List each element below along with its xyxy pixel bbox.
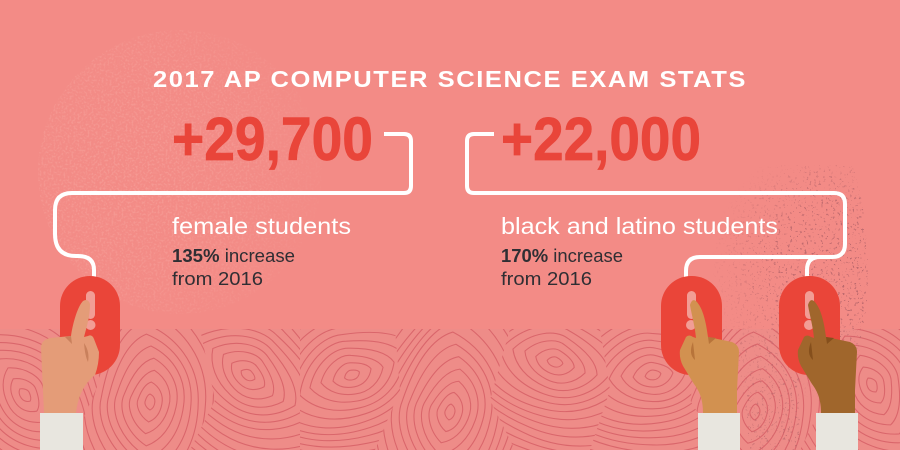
detail: from 2016: from 2016 xyxy=(501,268,592,289)
connector line: female students to left mouse xyxy=(55,134,411,277)
number: +22,000: +22,000 xyxy=(501,105,701,173)
detail: 135% increase: 135% increase xyxy=(172,245,295,266)
shirt cuff xyxy=(40,413,83,450)
hand xyxy=(680,300,739,413)
mouse scroll slot xyxy=(687,291,696,319)
stat: female students xyxy=(172,105,373,289)
mouse button dot xyxy=(686,320,696,330)
mouse button dot xyxy=(86,320,96,330)
detail: from 2016: from 2016 xyxy=(172,268,263,289)
hand xyxy=(798,300,857,413)
texture: dark speckle at right xyxy=(720,165,868,450)
shirt cuff xyxy=(698,413,740,450)
label: female students: female students xyxy=(172,213,351,239)
mouse scroll slot xyxy=(86,291,95,319)
finger shadow xyxy=(809,337,834,360)
icon: middle mouse and hand xyxy=(661,276,740,450)
mouse button dot xyxy=(804,320,814,330)
icon: right mouse and hand xyxy=(779,276,858,450)
texture: faint speckled circle behind left stat xyxy=(38,37,263,302)
label: black and latino students: black and latino students xyxy=(501,213,778,239)
stat: black and latino students xyxy=(501,105,778,289)
icon: left mouse and hand xyxy=(40,276,120,450)
mouse body xyxy=(779,276,840,375)
hand xyxy=(41,300,99,413)
number: +29,700: +29,700 xyxy=(172,105,373,173)
finger shadow xyxy=(691,337,716,360)
contour line band xyxy=(0,329,900,450)
mouse body xyxy=(661,276,722,375)
shirt cuff xyxy=(816,413,858,450)
mouse scroll slot xyxy=(805,291,814,319)
detail: 170% increase: 170% increase xyxy=(501,245,623,266)
title: 2017 AP COMPUTER SCIENCE EXAM STATS xyxy=(153,66,747,92)
finger shadow xyxy=(65,336,88,362)
connector line: black and latino students to right mice xyxy=(467,134,845,277)
mouse body xyxy=(60,276,120,375)
